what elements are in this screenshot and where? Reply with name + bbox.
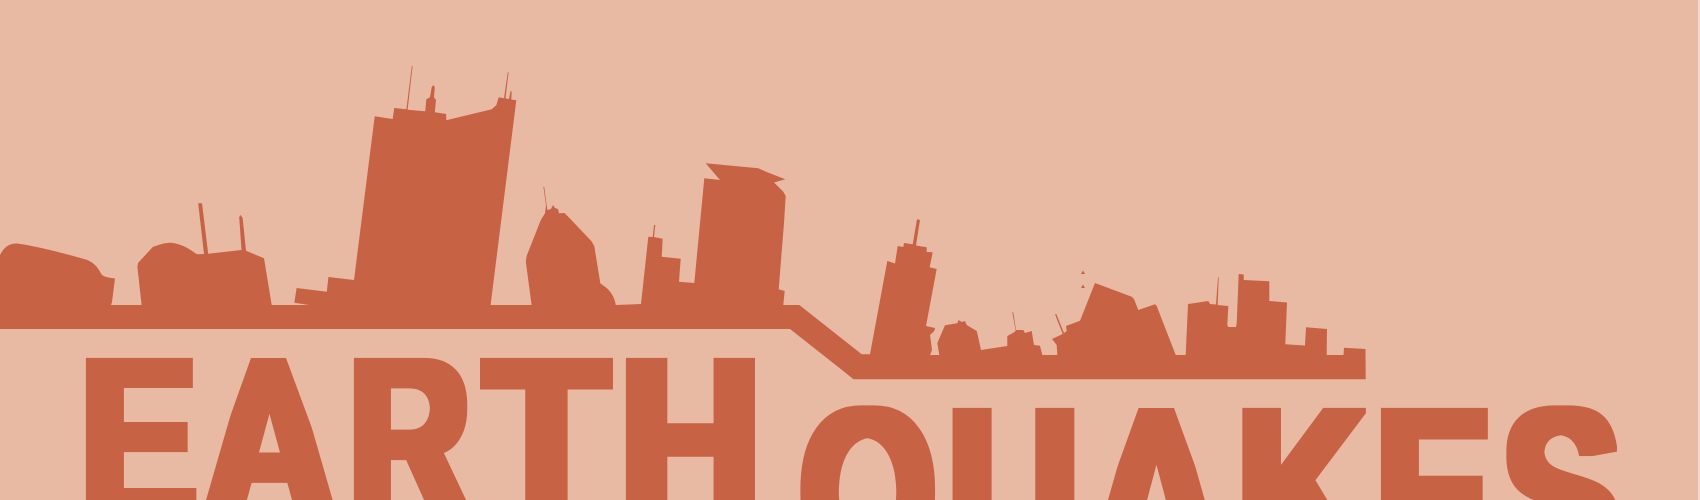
title line two: QUAKES [800, 405, 1617, 500]
illustration: collapsing city skyline on a fractured ground band [0, 66, 1366, 379]
title line one: EARTH [86, 358, 755, 500]
